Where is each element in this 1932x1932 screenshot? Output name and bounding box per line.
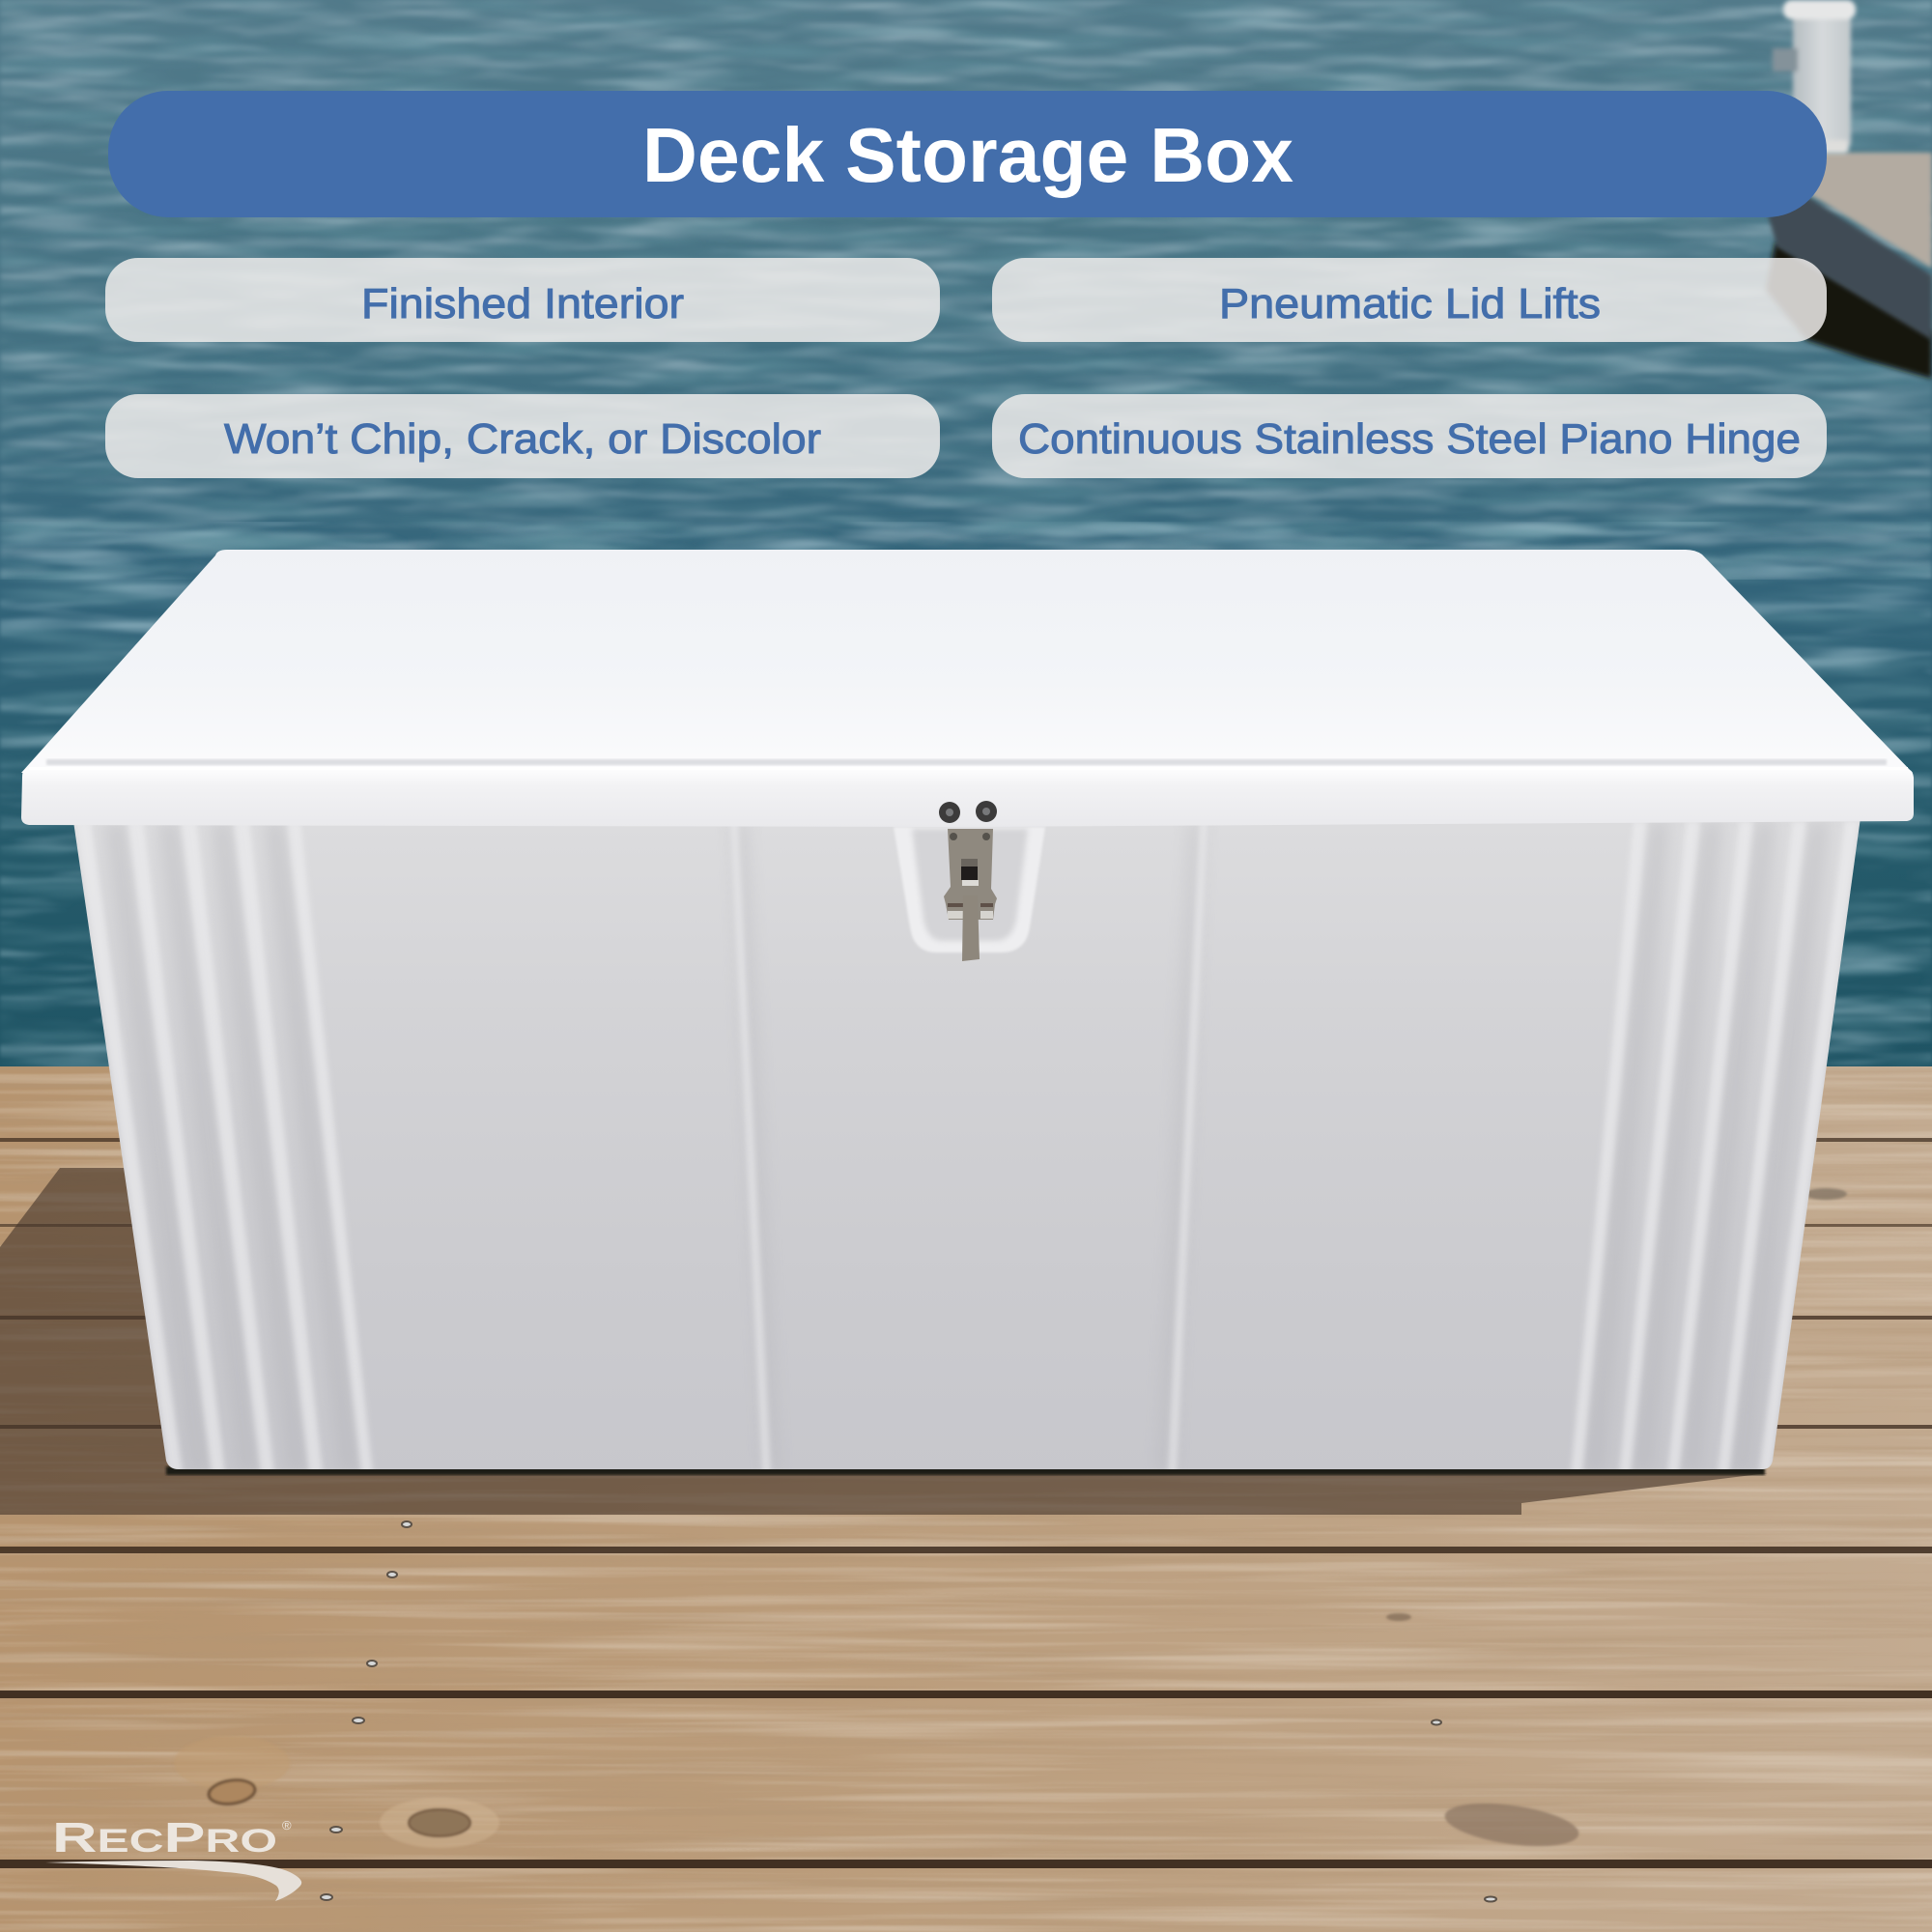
logo swoosh [45,1861,301,1901]
feature pill: piano hinge [992,394,1827,478]
right ribs [1571,821,1859,1473]
hasp plate [944,829,997,920]
lid groove [29,759,1908,772]
feature pill: pneumatic lid lifts [992,258,1827,342]
latch recess [894,827,1045,952]
water background [0,0,1932,1068]
hinge knuckles [948,911,963,919]
box body [58,811,1874,1478]
box shadow on deck [0,1168,1768,1515]
RecPro logo: R EC P RO [52,1814,277,1861]
distant dock with post [1766,0,1932,379]
latch tongue [962,895,980,961]
feature pill: durability [105,394,940,478]
wood knots [174,1188,1847,1854]
feature pill: durability: Won’t Chip, Crack, or Discolor [224,415,821,463]
deck screws [321,1521,1496,1901]
lid top [21,550,1913,773]
lid front edge [21,770,1914,827]
left ribs [75,821,373,1473]
dock shadow [1766,242,1932,379]
lid screws [939,801,997,823]
deck board gaps [0,1138,1932,1868]
RecPro logo: ® [282,1818,292,1833]
feature pill: finished interior: Finished Interior [361,280,684,327]
title banner: Deck Storage Box [642,112,1293,198]
dock fascia [1768,197,1932,340]
title banner [108,91,1827,217]
storage box [21,550,1914,1478]
hasp slot [961,859,978,867]
feature pill: pneumatic lid lifts: Pneumatic Lid Lifts [1219,280,1601,327]
feature pill: piano hinge: Continuous Stainless Steel Piano Hinge [1018,415,1801,463]
dock top surface [1808,153,1932,269]
latch hardware [939,801,997,961]
feature pill: finished interior [105,258,940,342]
wooden deck [0,1066,1932,1932]
RecPro logo [45,1814,301,1901]
mooring post [1773,0,1856,154]
panel seams [730,821,1208,1473]
